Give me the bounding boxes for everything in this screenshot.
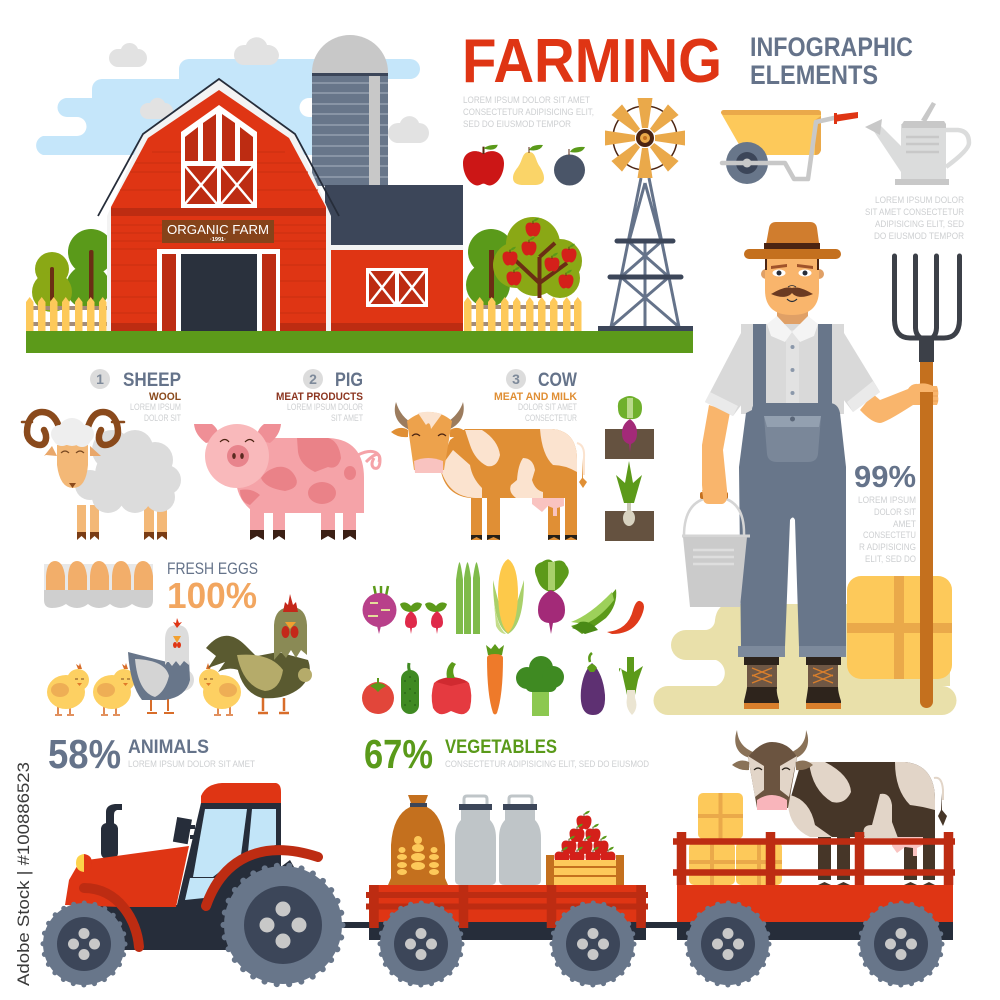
barn sign: ·1991· (210, 237, 226, 243)
label: pig: 2 (309, 371, 317, 387)
chicks (47, 663, 241, 715)
eggs label: 100% (167, 575, 257, 616)
left arm and sleeve (702, 333, 745, 504)
label: cow: MEAT AND MILK (494, 391, 577, 403)
icon: cucumber (401, 663, 419, 714)
annex window (366, 268, 428, 307)
tool description (865, 195, 964, 241)
soil with onion (605, 461, 654, 541)
stat: animals: ANIMALS (128, 736, 209, 758)
label: sheep: SHEEP (123, 370, 181, 391)
dark cow (732, 730, 947, 885)
sheep (22, 412, 181, 540)
intro text: CONSECTETUR ADIPISICING ELIT, (463, 107, 594, 117)
trailer 2 (673, 832, 955, 985)
intro text: LOREM IPSUM DOLOR SIT AMET (463, 95, 590, 105)
label: cow: CONSECTETUR (525, 413, 577, 423)
head (761, 258, 824, 330)
99 percent stat (854, 459, 916, 564)
icon: broccoli (516, 656, 564, 716)
99 percent stat: R ADIPISICING (859, 542, 916, 552)
intro text: SED DO EIUSMOD TEMPOR (463, 119, 571, 129)
label: sheep (90, 369, 181, 423)
barn sign: ORGANIC FARM (167, 222, 269, 237)
headlight (76, 854, 92, 872)
label: sheep: WOOL (149, 391, 181, 403)
label: pig: LOREM IPSUM DOLOR (287, 402, 363, 412)
soil with beet (605, 396, 654, 459)
right fence (464, 297, 582, 331)
eggs label: FRESH EGGS (167, 560, 258, 578)
icon: tomato (362, 678, 394, 714)
icon: green onion (619, 657, 643, 715)
vegetables row 2 (362, 644, 643, 716)
label: sheep: DOLOR SIT (144, 413, 181, 423)
rear wheel (224, 866, 342, 984)
icon: plum (554, 147, 585, 186)
boots (744, 657, 841, 709)
cab (173, 783, 281, 905)
tool description: LOREM IPSUM DOLOR (875, 195, 964, 205)
icon: turnip (362, 586, 396, 634)
hen (128, 618, 194, 713)
bib pocket (764, 416, 821, 462)
hand on handle (918, 383, 938, 405)
icon: corn (493, 559, 524, 634)
chassis (100, 860, 310, 950)
99 percent stat: CONSECTETU (863, 530, 916, 540)
cargo: milk cans (455, 796, 541, 885)
icon: beet (535, 560, 569, 634)
wheel blades (605, 98, 685, 178)
tool description: SIT AMET CONSECTETUR (865, 207, 964, 217)
beige ground under farmer (654, 604, 956, 715)
label: pig: MEAT PRODUCTS (276, 391, 363, 403)
right arm and sleeve (840, 333, 926, 423)
vegetables row 1 (362, 559, 644, 634)
cargo: sack (388, 795, 448, 885)
exhaust (101, 804, 122, 866)
label: cow (494, 369, 577, 423)
hood (65, 846, 189, 907)
bucket (682, 490, 750, 607)
tool description: ADIPISICING ELIT, SED (875, 219, 964, 229)
rooster (206, 594, 312, 713)
icon: asparagus (456, 562, 480, 634)
sky band (36, 59, 420, 155)
label: pig: SIT AMET (331, 413, 363, 423)
icon: peas (571, 589, 616, 634)
rear fender (206, 850, 318, 906)
99 percent stat: 99% (854, 459, 916, 494)
stat: vegetables (364, 731, 649, 777)
label: cow: COW (538, 370, 577, 391)
tractor (43, 783, 342, 985)
front wheel (43, 903, 125, 985)
fruits (463, 145, 585, 186)
tower (610, 178, 681, 327)
loft window (181, 105, 257, 208)
hat (744, 222, 841, 259)
99 percent stat: AMET (893, 519, 916, 529)
stat: animals (48, 731, 255, 777)
hay bales on trailer (689, 793, 782, 885)
egg tray (44, 561, 153, 608)
windmill (598, 98, 693, 331)
right trees (466, 217, 582, 307)
pig (194, 424, 380, 540)
label: cow: DOLOR SIT AMET (518, 402, 577, 412)
label: pig: PIG (335, 370, 363, 391)
label: sheep: 1 (96, 371, 104, 387)
front fender (84, 888, 139, 947)
stat: animals: 58% (48, 731, 121, 777)
icon: carrot (486, 644, 504, 714)
wheelbarrow (721, 110, 858, 184)
label: pig (276, 369, 363, 423)
label: sheep: LOREM IPSUM (130, 402, 181, 412)
apple tree (493, 217, 582, 298)
barn sign (162, 220, 274, 243)
icon: eggplant (581, 653, 605, 715)
stat: vegetables: VEGETABLES (445, 736, 557, 758)
tool description: DO EIUSMOD TEMPOR (874, 231, 964, 241)
label: cow: 3 (512, 371, 520, 387)
stat: animals: LOREM IPSUM DOLOR SIT AMET (128, 759, 255, 769)
99 percent stat: LOREM IPSUM (858, 495, 916, 505)
silo (312, 35, 388, 186)
trailer 1 (366, 885, 648, 985)
icon: pepper (432, 662, 471, 714)
farmer (702, 222, 926, 709)
pitchfork (894, 256, 960, 708)
left fence (26, 297, 107, 331)
hay bale (847, 576, 952, 679)
subtitle: ELEMENTS (750, 60, 878, 90)
horns (22, 412, 124, 445)
stat: vegetables: 67% (364, 731, 433, 777)
stat: vegetables: CONSECTETUR ADIPISICING ELIT, SED DO EIUSMOD (445, 759, 649, 769)
99 percent stat: DOLOR SIT (874, 507, 916, 517)
orange cow (391, 402, 587, 540)
icon: apple (463, 145, 504, 186)
icon: pear (513, 145, 544, 185)
ground (26, 331, 693, 353)
cargo: apple crate (546, 811, 624, 885)
tow bars (340, 922, 680, 928)
icon: chili (607, 601, 644, 634)
barn door (157, 249, 280, 331)
watering can (865, 102, 969, 185)
shirt (741, 316, 844, 414)
icon: radishes (400, 602, 447, 634)
trees left of barn (32, 229, 114, 312)
title: FARMING (462, 27, 722, 96)
subtitle: INFOGRAPHIC (750, 32, 913, 62)
annex building (325, 185, 463, 331)
barn (98, 79, 339, 331)
clouds (109, 37, 429, 143)
intro text (463, 95, 594, 129)
99 percent stat: ELIT, SED DO (865, 554, 916, 564)
subtitle (750, 32, 913, 90)
overalls (738, 324, 846, 657)
stock credit: Adobe Stock | #100886523 (14, 762, 33, 986)
